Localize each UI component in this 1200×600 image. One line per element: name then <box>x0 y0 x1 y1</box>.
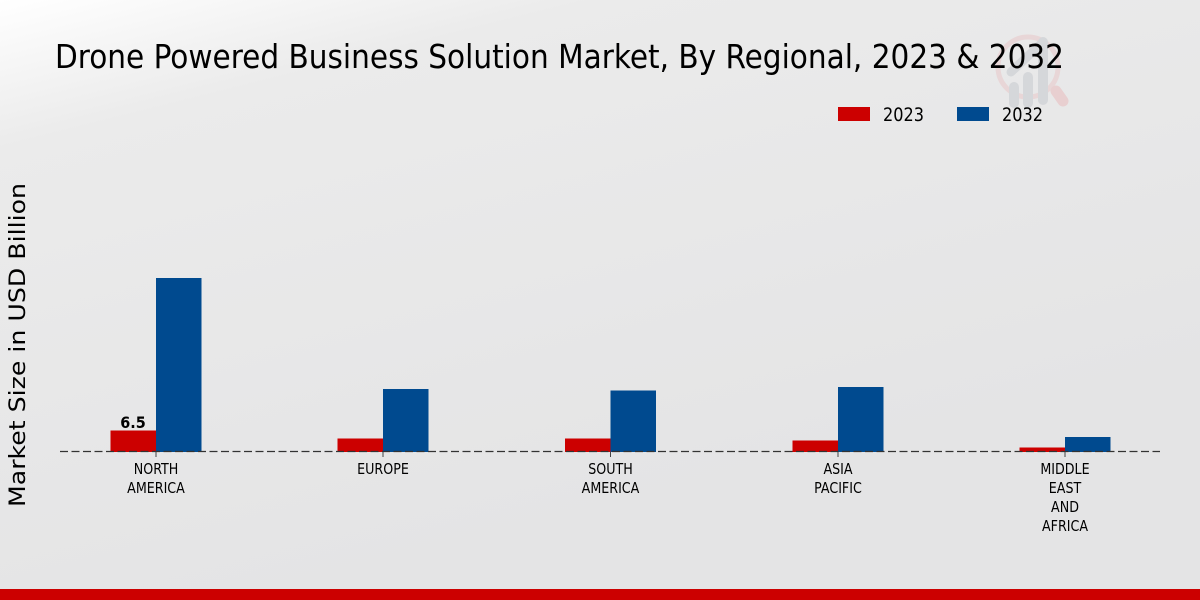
icon: watermark logo <box>998 37 1063 103</box>
label: Middle East and Africa: MIDDLE <box>1040 461 1090 478</box>
label: North America: NORTH <box>134 461 178 478</box>
data label: 6.5 <box>120 413 146 432</box>
label: South America: SOUTH <box>588 461 633 478</box>
region: South America <box>565 390 656 452</box>
legend item: 2032: 2032 <box>1002 104 1043 126</box>
y axis title: Market Size in USD Billion <box>5 183 31 507</box>
label: North America: AMERICA <box>127 480 185 497</box>
bar chart <box>110 278 1110 452</box>
title: Drone Powered Business Solution Market, By Regional, 2023 & 2032 <box>55 37 1064 76</box>
region: Asia Pacific <box>792 387 884 452</box>
label: Middle East and Africa: AFRICA <box>1042 518 1088 535</box>
footer bar <box>0 589 1200 600</box>
legend item: 2023: 2023 <box>883 104 924 126</box>
region: Europe <box>338 389 428 452</box>
category labels <box>127 461 1090 535</box>
label: Middle East and Africa: EAST <box>1049 480 1082 497</box>
label: South America: AMERICA <box>582 480 639 497</box>
label: Europe: EUROPE <box>357 461 409 478</box>
legend <box>838 104 1043 126</box>
legend item: 2023 <box>838 104 924 126</box>
legend item: 2032 <box>957 104 1043 126</box>
label: Asia Pacific: PACIFIC <box>814 480 862 497</box>
label: Middle East and Africa: AND <box>1051 499 1079 516</box>
region: North America <box>110 278 202 452</box>
label: Asia Pacific: ASIA <box>823 461 853 478</box>
region: Middle East and Africa <box>1020 437 1110 452</box>
